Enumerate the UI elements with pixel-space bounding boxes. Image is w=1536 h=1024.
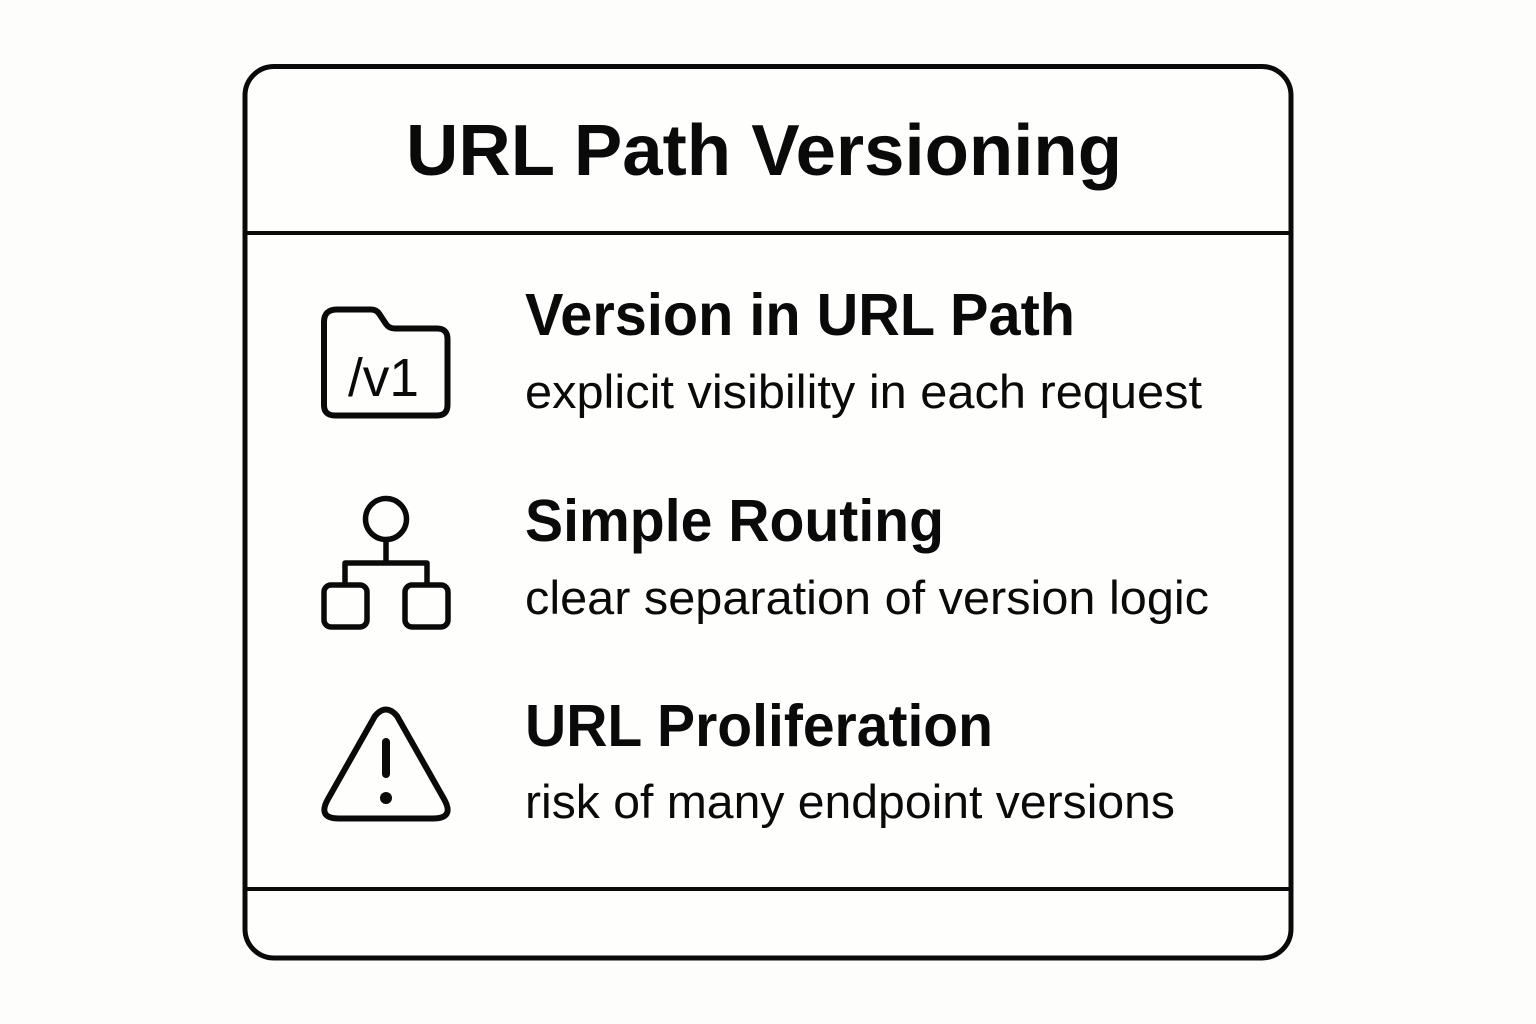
icon: folder with /v1 [324, 310, 448, 416]
icon: folder with /v1: /v1 [348, 348, 419, 408]
text: clear separation: clear separation of version logic [525, 571, 1209, 624]
icon: routing tree [324, 498, 448, 627]
header divider [246, 231, 1290, 235]
icon: warning triangle [324, 710, 448, 818]
heading: Simple Routing: Simple Routing [525, 488, 944, 554]
heading: Version in URL Path: Version in URL Path [525, 282, 1075, 348]
title: URL Path Versioning [406, 111, 1122, 191]
footer divider [246, 887, 1290, 891]
text: explicit visibility: explicit visibility in each request [525, 365, 1202, 418]
heading: URL Proliferation: URL Proliferation [525, 693, 993, 759]
text: risk of many: risk of many endpoint versions [525, 775, 1175, 828]
panel: card outline [245, 66, 1291, 958]
